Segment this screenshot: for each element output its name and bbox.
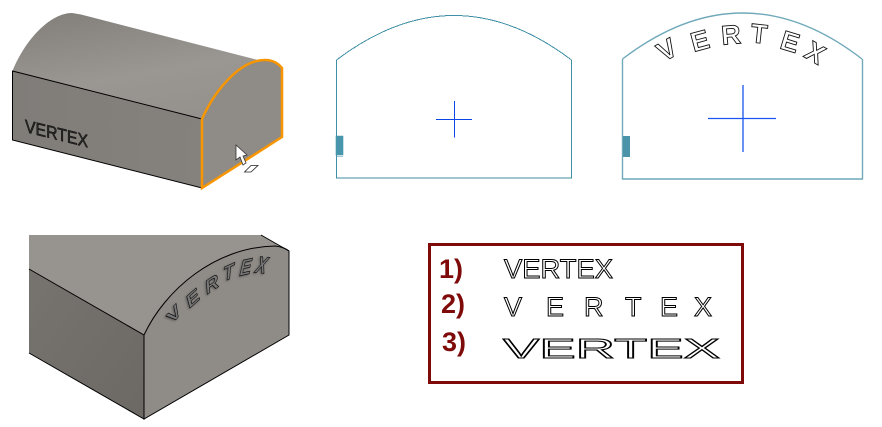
curved outlined text VERTEX: V (652, 33, 682, 67)
embossed text VERTEX (164, 252, 272, 328)
embossed text VERTEX: X (252, 252, 272, 279)
engraved text VERTEX: VERTEX (25, 115, 88, 151)
embossed text VERTEX: E (185, 284, 202, 313)
curved outlined text VERTEX: E (777, 25, 803, 59)
left face (29, 269, 144, 419)
icon: plane marker (244, 166, 258, 172)
panel: sketch profile empty (336, 16, 572, 178)
blue center cross (708, 85, 776, 152)
blue center cross (436, 101, 472, 138)
sketch outline (336, 16, 572, 178)
curved outlined text VERTEX: E (687, 24, 713, 58)
sketch outline (622, 13, 863, 179)
sketch origin marker (336, 136, 343, 156)
panel: sketch profile with curved text (622, 13, 863, 179)
curved outlined text VERTEX: R (720, 19, 742, 51)
legend frame (430, 244, 742, 382)
label 1: 1) (439, 254, 463, 284)
panel: solid with text on end face (29, 235, 289, 419)
left face (12, 71, 202, 188)
embossed text VERTEX: V (164, 301, 185, 328)
curved outlined text VERTEX: T (749, 18, 769, 50)
curved outlined text VERTEX (652, 18, 830, 70)
top curved face (29, 235, 289, 335)
sample 3: stretched: VERTEX (503, 333, 721, 364)
icon: mouse cursor (236, 145, 247, 165)
end face with orange highlight (202, 60, 282, 188)
embossed text VERTEX: R (205, 269, 219, 300)
panel: text style legend (430, 244, 742, 382)
label 2: 2) (441, 289, 465, 319)
sketch origin marker (623, 136, 630, 157)
sample 1: normal: VERTEX (504, 254, 613, 284)
embossed text VERTEX: E (237, 254, 254, 282)
panel: solid with selected end face (12, 13, 282, 188)
curved outlined text VERTEX: X (800, 36, 830, 70)
label 3: 3) (442, 327, 466, 357)
embossed text VERTEX: T (222, 258, 236, 287)
end face (144, 246, 289, 419)
top curved face (12, 13, 262, 119)
sample 2: wide spacing: VERTEX (504, 292, 712, 322)
